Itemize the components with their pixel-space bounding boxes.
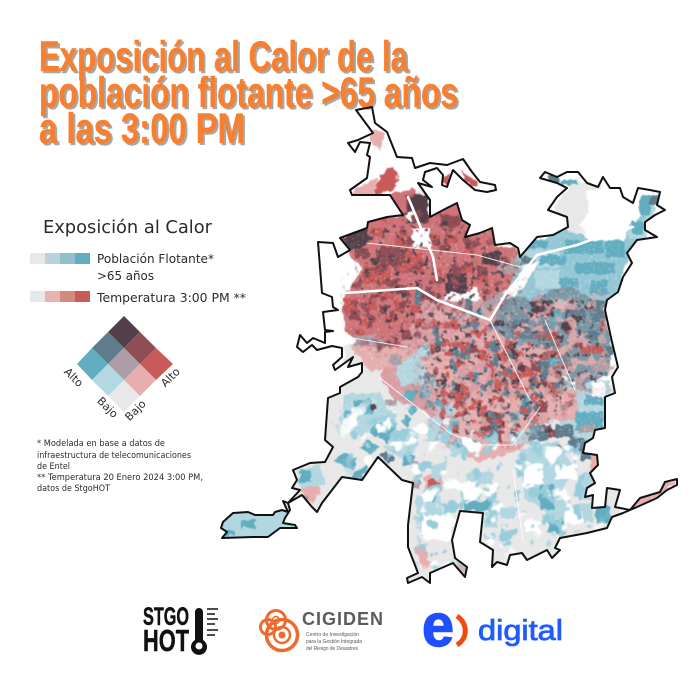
Entel e mark: e bbox=[422, 592, 454, 659]
bivariate map of Santiago bbox=[215, 107, 677, 590]
map: light blue blocks bbox=[298, 205, 655, 530]
map: grey low-low base bbox=[285, 181, 630, 582]
footnotes bbox=[37, 439, 203, 494]
map: north-east blue zone bbox=[510, 190, 655, 305]
CIGIDEN tagline bbox=[306, 632, 363, 652]
map: blotch overlay centre teal bbox=[410, 295, 580, 450]
map: urban speckle texture bbox=[340, 225, 620, 455]
footnotes: infraestructura de telecomunicaciones bbox=[37, 451, 191, 461]
map: white road network bbox=[345, 197, 633, 540]
legend: population label: Población Flotante* bbox=[97, 252, 214, 266]
title: población flotante >65 años bbox=[39, 69, 458, 117]
StgoHOT wordmark: STGO bbox=[143, 603, 189, 631]
digital wordmark: digital bbox=[478, 615, 563, 647]
legend: temperature colour ramp bbox=[30, 291, 90, 302]
legend: temperature label: Temperatura 3:00 PM ** bbox=[96, 291, 246, 305]
bivariate legend diamond: Bajo bbox=[122, 397, 149, 424]
logo: CIGIDEN bbox=[260, 609, 383, 652]
icon: thermometer bbox=[191, 608, 218, 655]
CIGIDEN tagline: para la Gestión Integrada bbox=[306, 639, 363, 645]
footnotes: ** Temperatura 20 Enero 2024 3:00 PM, bbox=[37, 473, 203, 483]
map: mauve blocks bbox=[300, 260, 610, 501]
title bbox=[39, 33, 458, 153]
icon: CIGIDEN concentric circles bbox=[260, 610, 298, 650]
logo: StgoHOT bbox=[143, 603, 218, 658]
bivariate legend diamond: Alto bbox=[61, 365, 86, 390]
map: eastern teal zone bbox=[488, 286, 612, 384]
map: blotch overlay north-west dark bbox=[340, 190, 530, 360]
StgoHOT wordmark bbox=[143, 603, 189, 658]
legend: population colour ramp bbox=[30, 253, 90, 264]
map: northern red and pink patches bbox=[376, 165, 478, 195]
map: saturated blue blocks bbox=[225, 180, 650, 536]
map: white voids bbox=[355, 190, 635, 540]
bivariate legend diamond: Alto bbox=[158, 365, 183, 390]
title: a las 3:00 PM bbox=[39, 105, 245, 153]
map: blotch overlay centre pink bbox=[416, 308, 572, 448]
map: teal-grey blocks bbox=[380, 175, 658, 466]
footnotes: de Entel bbox=[37, 462, 70, 472]
panel: legend bbox=[30, 217, 246, 305]
legend: population label bbox=[97, 252, 214, 283]
CIGIDEN tagline: del Riesgo de Desastres bbox=[306, 646, 358, 652]
CIGIDEN wordmark: CIGIDEN bbox=[302, 609, 383, 629]
map: blotch overlay south blue bbox=[330, 395, 610, 580]
legend heading: Exposición al Calor bbox=[43, 217, 213, 238]
map: blotch overlay centre red bbox=[410, 295, 580, 450]
title: Exposición al Calor de la bbox=[39, 33, 409, 81]
map: dark red blocks bbox=[350, 215, 583, 453]
map: red blocks bbox=[343, 200, 605, 488]
footnotes: * Modelada en base a datos de bbox=[37, 439, 165, 449]
map: dark hot-and-populated blocks bbox=[340, 195, 580, 449]
StgoHOT wordmark: HOT bbox=[143, 623, 189, 658]
CIGIDEN tagline: Centro de Investigación bbox=[306, 632, 359, 638]
bivariate legend diamond: Bajo bbox=[94, 394, 121, 421]
map: blotch overlay east dark bbox=[501, 286, 616, 396]
legend: population label: >65 años bbox=[97, 269, 154, 283]
map: pink temperature halos bbox=[300, 340, 677, 577]
bivariate legend diamond bbox=[61, 316, 183, 424]
map: blotch overlay centre dark bbox=[410, 295, 580, 450]
logo: Entel digital bbox=[422, 592, 563, 659]
map: municipal outline bbox=[221, 107, 677, 583]
map: south-east light blue zone bbox=[222, 342, 610, 540]
map: central mixed zone bbox=[380, 300, 565, 450]
icon: Entel orange arc bbox=[457, 616, 465, 645]
footnotes: datos de StgoHOT bbox=[37, 484, 110, 494]
map: blotch overlay east pink bbox=[499, 286, 616, 396]
map: blotch overlay south white bbox=[330, 395, 610, 580]
map: north-west hot zone bbox=[340, 188, 522, 355]
map: blotch overlay north-west dark red bbox=[340, 190, 530, 360]
